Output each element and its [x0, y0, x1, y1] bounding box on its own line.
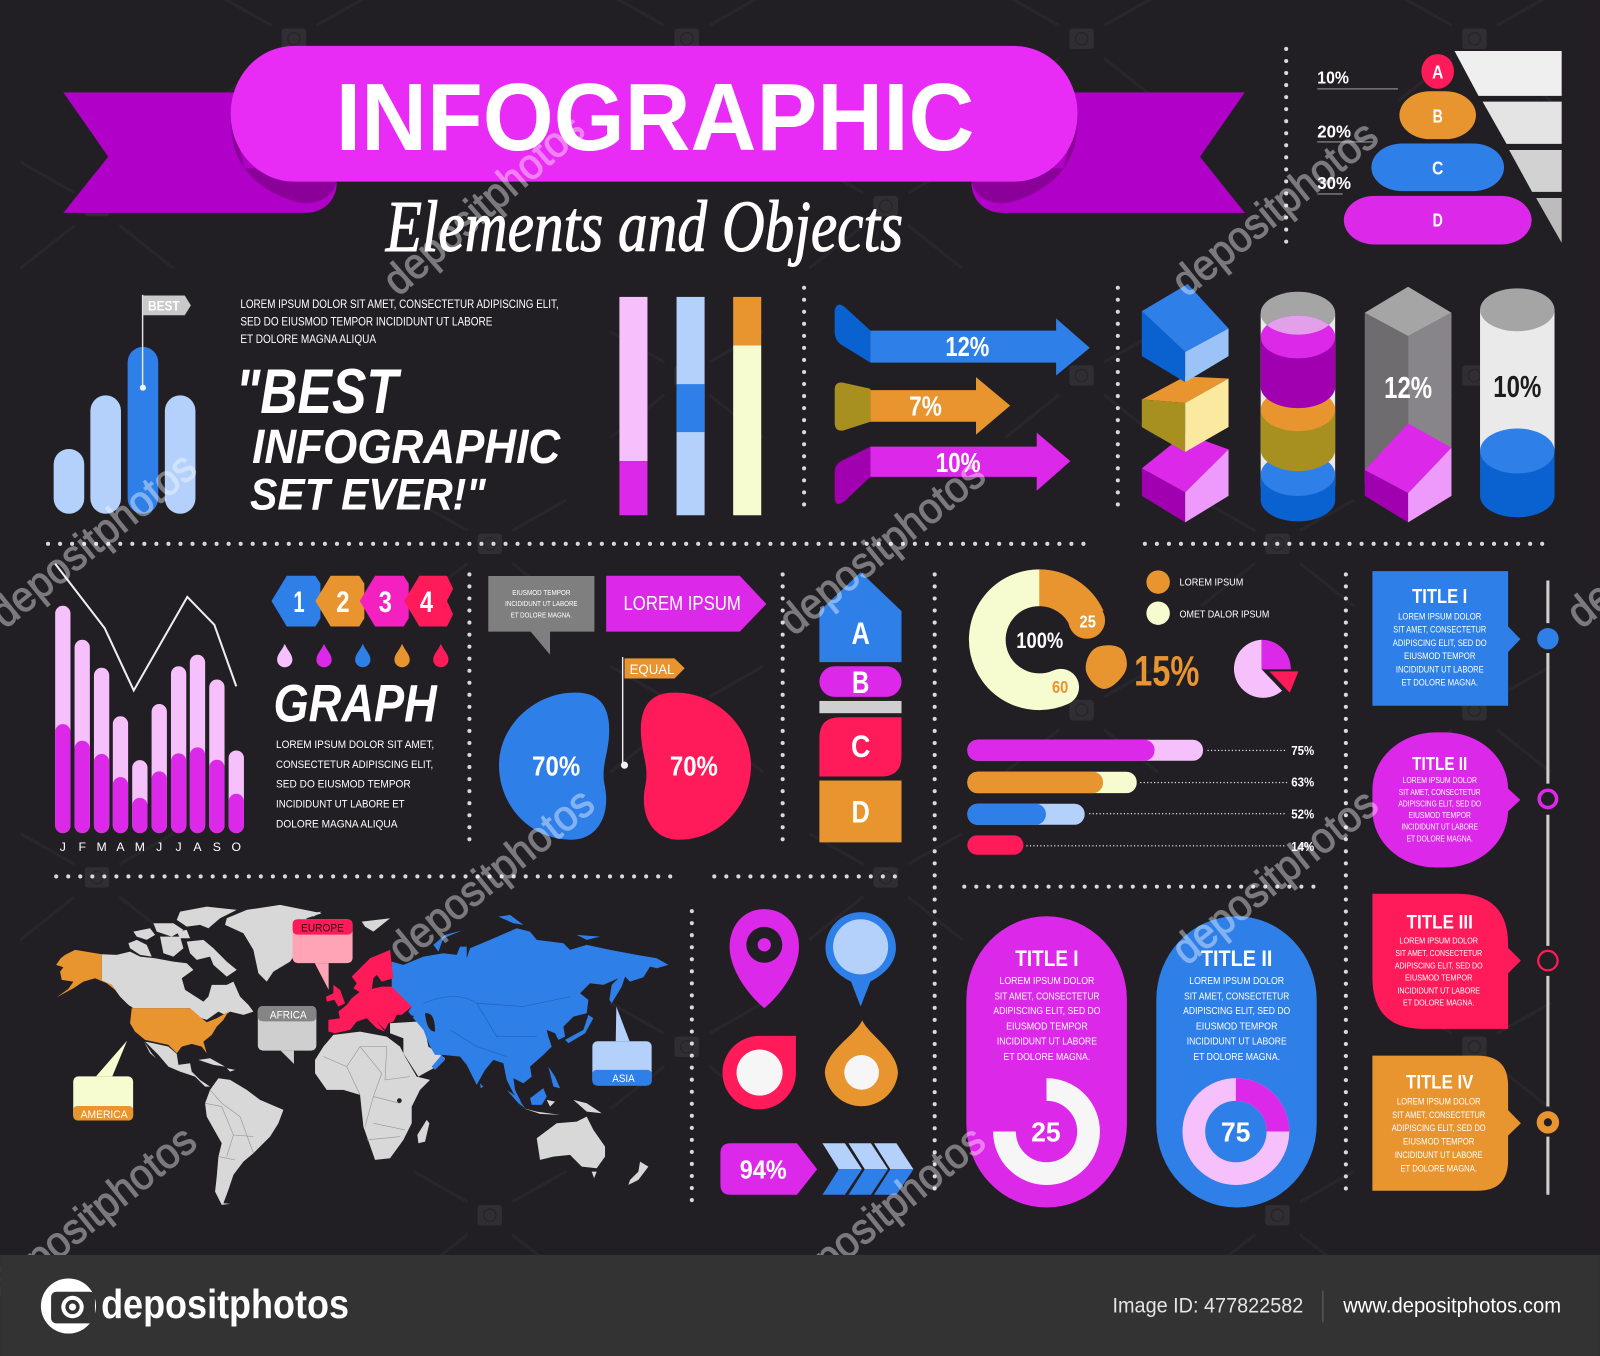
lorem ipsum arrow tag: LOREM IPSUM	[623, 593, 741, 615]
intro paragraph: LOREM IPSUM DOLOR SIT AMET, CONSECTETUR ADIPISCING ELIT,	[240, 298, 559, 311]
callout asia: ASIA	[612, 1073, 636, 1085]
donut 75	[1194, 1089, 1278, 1174]
graph paragraph	[276, 739, 434, 830]
arrow 10%: 10%	[936, 447, 981, 478]
donut chart 100%: 60	[1052, 677, 1068, 697]
pyramid percent labels: 10%	[1317, 68, 1349, 88]
bar percent labels: 52%	[1291, 806, 1314, 821]
grey speech bubble: INCIDIDUNT UT LABORE	[505, 600, 578, 608]
pill card title II with donut 75: ADIPISCING ELIT, SED DO	[1183, 1006, 1290, 1017]
month labels: J	[156, 840, 162, 854]
monthly column chart	[55, 564, 244, 854]
arrow 7%: 7%	[909, 390, 942, 421]
pyramid levels	[1344, 54, 1532, 244]
watermarks: depositphotos	[770, 1116, 994, 1311]
americas and greenland	[56, 905, 322, 1205]
card title III: SIT AMET, CONSECTETUR	[1395, 948, 1482, 958]
card title III: EIUSMOD TEMPOR	[1405, 973, 1472, 983]
watermarks: depositphotos	[374, 105, 594, 305]
graph paragraph: SED DO EIUSMOD TEMPOR	[276, 779, 411, 791]
pyramid levels: A	[1432, 62, 1443, 83]
15% stat	[1086, 645, 1199, 696]
pill card title I with donut 25: ET DOLORE MAGNA.	[1004, 1052, 1090, 1063]
graph paragraph: LOREM IPSUM DOLOR SIT AMET,	[276, 739, 434, 751]
title text: INFOGRAPHIC	[336, 64, 974, 171]
card title I: ET DOLORE MAGNA.	[1401, 678, 1478, 688]
quote heading	[236, 357, 561, 520]
card title I: EIUSMOD TEMPOR	[1404, 651, 1476, 661]
pill card title II with donut 75	[1156, 916, 1317, 1208]
blue blob 70%: 70%	[532, 750, 580, 781]
equal flag: EQUAL	[630, 662, 675, 678]
arrow 12%	[835, 305, 1090, 375]
europe	[326, 950, 412, 1033]
card title IV: ADIPISCING ELIT, SED DO	[1392, 1123, 1486, 1133]
pill card title II with donut 75: ET DOLORE MAGNA.	[1193, 1052, 1280, 1063]
pill card title II with donut 75: EIUSMOD TEMPOR	[1196, 1021, 1278, 1032]
timeline cards	[1372, 571, 1559, 1195]
pyramid percent labels	[1317, 68, 1398, 195]
numbered hexagons	[271, 576, 453, 626]
donut legend: LOREM IPSUM	[1180, 578, 1243, 589]
timeline rail	[1537, 581, 1559, 1195]
numbered hexagons: 3	[379, 586, 392, 619]
eurasia africa oceania	[310, 912, 668, 1185]
numbered hexagons: 4	[420, 586, 434, 619]
card title II: INCIDIDUNT UT LABORE	[1401, 823, 1478, 832]
usa	[130, 1008, 228, 1053]
pyramid percent labels: 20%	[1317, 122, 1351, 142]
ribbon band	[231, 46, 1078, 182]
callout america: AMERICA	[81, 1109, 128, 1121]
donut legend: OMET DALOR IPSUM	[1180, 609, 1269, 620]
asia	[392, 928, 668, 1103]
ABCD tags: C	[851, 728, 870, 764]
donut 25: 25	[1031, 1117, 1061, 1148]
card title IV: EIUSMOD TEMPOR	[1403, 1137, 1475, 1147]
donut chart 100%	[987, 588, 1105, 697]
ABCD tags	[819, 572, 902, 842]
pill card title II with donut 75: SIT AMET, CONSECTETUR	[1184, 991, 1289, 1002]
card title IV: INCIDIDUNT UT LABORE	[1395, 1150, 1483, 1160]
donut legend	[1146, 570, 1269, 625]
ribbon left tail	[63, 92, 337, 213]
month labels	[60, 840, 241, 854]
icon: magenta map pin	[730, 909, 799, 1008]
depositphotos logo	[41, 1278, 349, 1334]
pyramid percent labels: 30%	[1317, 173, 1351, 193]
card title I: TITLE I	[1412, 586, 1467, 608]
rounded bar chart with flag: BEST	[148, 299, 180, 314]
donut 25	[1004, 1089, 1089, 1174]
pill card title I with donut 25: EIUSMOD TEMPOR	[1006, 1021, 1088, 1032]
madagascar	[417, 1120, 429, 1143]
15% stat: 15%	[1134, 648, 1199, 696]
arrow 12%: 12%	[945, 331, 989, 362]
donut chart 100%: 25	[1080, 611, 1096, 631]
card title III	[1372, 894, 1521, 1029]
donut 75: 75	[1221, 1117, 1250, 1148]
card title IV: SIT AMET, CONSECTETUR	[1392, 1110, 1485, 1120]
cylinder 10%	[1480, 288, 1555, 517]
callout america	[73, 1041, 133, 1121]
equal flag	[621, 657, 685, 769]
asian islands	[432, 915, 600, 1108]
graph paragraph: DOLORE MAGNA ALIQUA	[276, 818, 398, 830]
ribbon right tail	[971, 92, 1245, 213]
icon: orange drop	[825, 1020, 898, 1106]
pyramid levels: C	[1432, 157, 1443, 178]
card title I: SIT AMET, CONSECTETUR	[1393, 625, 1486, 635]
colour drops	[277, 644, 449, 667]
pill card title II with donut 75: INCIDIDUNT UT LABORE	[1187, 1037, 1287, 1048]
pyramid side wedge	[1455, 51, 1562, 243]
graph heading: GRAPH	[274, 674, 438, 733]
stacked vertical bars	[619, 297, 761, 515]
card title IV	[1372, 1056, 1521, 1191]
numbered hexagons: 2	[336, 586, 350, 619]
watermarks: depositphotos	[379, 778, 603, 973]
prism 12%	[1365, 287, 1451, 522]
card title II: EIUSMOD TEMPOR	[1409, 811, 1471, 820]
prism 12%: 12%	[1384, 371, 1432, 405]
watermarks: depositphotos	[770, 450, 994, 645]
watermarks: depositphotos	[1163, 111, 1387, 306]
bar percent labels: 14%	[1291, 839, 1314, 854]
chevron arrows	[822, 1143, 913, 1195]
pill card title II with donut 75: TITLE II	[1201, 946, 1272, 971]
month labels: S	[213, 840, 221, 854]
website url: www.depositphotos.com	[1342, 1295, 1561, 1318]
94% tag: 94%	[740, 1156, 787, 1184]
card title IV: LOREM IPSUM DOLOR	[1397, 1097, 1481, 1107]
red blob 70%	[641, 693, 751, 840]
card title II: SIT AMET, CONSECTETUR	[1399, 788, 1481, 797]
card title IV: ET DOLORE MAGNA.	[1400, 1163, 1477, 1173]
watermarks: depositphotos	[1163, 779, 1387, 974]
depositphotos logo: depositphotos	[101, 1281, 349, 1327]
card title III: TITLE III	[1407, 911, 1473, 933]
bar percent labels: 75%	[1291, 743, 1314, 758]
month labels: O	[232, 840, 241, 854]
grey speech bubble: EIUSMOD TEMPOR	[512, 589, 570, 597]
percent arrows	[835, 305, 1090, 504]
cylinder 10%: 10%	[1493, 370, 1541, 404]
callout africa	[258, 1006, 316, 1064]
pill card title II with donut 75: LOREM IPSUM DOLOR	[1189, 976, 1284, 987]
month labels: A	[193, 840, 202, 854]
isometric cube stack	[1142, 284, 1229, 522]
card title IV: TITLE IV	[1406, 1072, 1473, 1094]
graph paragraph: CONSECTETUR ADIPISCING ELIT,	[276, 759, 433, 771]
pill card title I with donut 25: INCIDIDUNT UT LABORE	[997, 1037, 1097, 1048]
intro paragraph: ET DOLORE MAGNA ALIQUA	[240, 333, 376, 346]
card title II: LOREM IPSUM DOLOR	[1402, 776, 1477, 785]
canada and mexico	[102, 907, 253, 1087]
icon: red drop	[722, 1036, 796, 1109]
graph paragraph: INCIDIDUNT UT LABORE ET	[276, 799, 405, 811]
ABCD tags: A	[852, 615, 870, 651]
callout europe: EUROPE	[301, 923, 344, 935]
month labels: F	[78, 840, 86, 854]
pill card title I with donut 25: LOREM IPSUM DOLOR	[999, 976, 1094, 987]
card title II	[1372, 732, 1520, 867]
bar percent labels: 63%	[1291, 775, 1314, 790]
icon: blue map pin	[826, 912, 896, 1007]
title ribbon	[63, 46, 1245, 213]
red blob 70%: 70%	[670, 750, 718, 781]
stacked cylinder	[1261, 292, 1335, 521]
month labels: J	[176, 840, 182, 854]
pyramid levels: D	[1433, 210, 1443, 231]
grey speech bubble	[488, 576, 594, 655]
footer bar	[0, 1255, 1600, 1356]
card title I	[1372, 571, 1520, 706]
callout europe	[293, 919, 353, 990]
94% tag	[720, 1143, 817, 1195]
card title II: ADIPISCING ELIT, SED DO	[1398, 799, 1481, 808]
card title II: ET DOLORE MAGNA.	[1407, 834, 1473, 843]
card title III: INCIDIDUNT UT LABORE	[1397, 985, 1480, 995]
pie chart	[1234, 640, 1298, 698]
rounded bar chart with flag	[54, 295, 195, 514]
arrow 7%	[835, 377, 1010, 435]
africa	[315, 1032, 430, 1160]
pill card title I with donut 25: TITLE I	[1015, 946, 1079, 971]
pill card title I with donut 25: ADIPISCING ELIT, SED DO	[993, 1006, 1101, 1017]
greenland	[225, 905, 322, 982]
bar percent labels	[1291, 743, 1314, 854]
grey speech bubble: ET DOLORE MAGNA.	[511, 611, 572, 619]
month labels: M	[96, 840, 107, 854]
alaska	[56, 950, 120, 997]
arabia and turkey	[390, 1022, 445, 1077]
card title III: LOREM IPSUM DOLOR	[1399, 935, 1478, 945]
card title I: ADIPISCING ELIT, SED DO	[1393, 638, 1487, 648]
card title II: TITLE II	[1412, 753, 1467, 774]
lorem ipsum arrow tag	[606, 576, 766, 632]
quote heading: INFOGRAPHIC	[252, 421, 561, 474]
ABCD tags: B	[852, 664, 869, 700]
pyramid chart	[1286, 49, 1562, 245]
australia and pacific islands	[310, 912, 648, 1185]
ABCD tags: D	[852, 793, 870, 829]
world map	[56, 905, 668, 1205]
month labels: J	[60, 840, 66, 854]
card title I: INCIDIDUNT UT LABORE	[1396, 664, 1484, 674]
donut chart 100%: 100%	[1016, 628, 1063, 653]
intro paragraph: SED DO EIUSMOD TEMPOR INCIDIDUNT UT LABORE	[240, 315, 493, 328]
intro paragraph	[240, 298, 559, 346]
arrow 10%	[835, 433, 1070, 504]
callout africa: AFRICA	[270, 1009, 307, 1021]
card title III: ET DOLORE MAGNA.	[1403, 998, 1474, 1008]
callout asia	[592, 1007, 652, 1086]
south america	[205, 1078, 283, 1205]
numbered hexagons: 1	[293, 586, 305, 619]
month labels: A	[116, 840, 125, 854]
blue blob 70%	[499, 693, 609, 840]
image id: Image ID: 477822582	[1113, 1295, 1303, 1318]
pyramid levels: B	[1433, 105, 1443, 126]
quote heading: SET EVER!"	[250, 469, 486, 520]
pill card title I with donut 25: SIT AMET, CONSECTETUR	[994, 991, 1099, 1002]
quote heading: "BEST	[236, 357, 402, 427]
card title III: ADIPISCING ELIT, SED DO	[1395, 960, 1483, 970]
horizontal progress bars	[967, 740, 1314, 855]
card title I: LOREM IPSUM DOLOR	[1398, 611, 1482, 621]
subtitle: Elements and Objects	[385, 186, 903, 267]
month labels: M	[135, 840, 145, 854]
pill card title I with donut 25	[966, 916, 1127, 1208]
